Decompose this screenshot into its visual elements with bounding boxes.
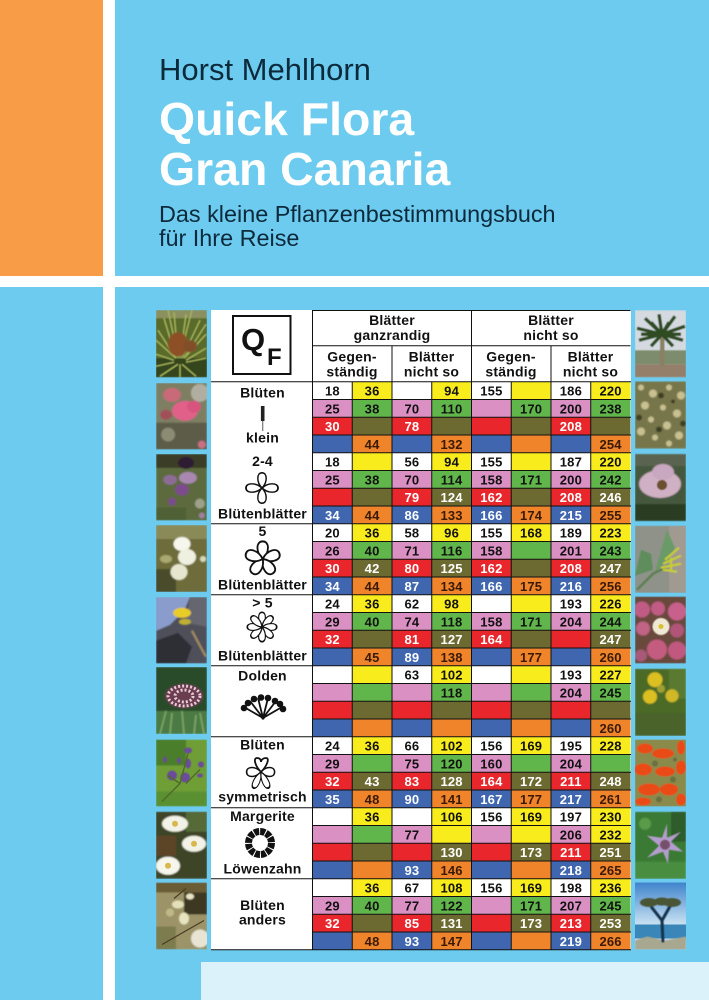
numbers: Blüten anders: 36 bbox=[365, 881, 380, 896]
photo: palm tree bbox=[635, 310, 686, 378]
numbers: Blüten klein: 238 bbox=[599, 401, 622, 416]
book title bbox=[159, 93, 452, 195]
icon: five petals bbox=[244, 541, 281, 576]
row labels: 5 bbox=[258, 523, 266, 539]
column headers: Blätter bbox=[528, 312, 574, 328]
subtitle bbox=[159, 201, 556, 251]
numbers: 5 Blütenblätter: 116 bbox=[441, 543, 462, 558]
numbers: Blüten symmetrisch: 156 bbox=[480, 739, 503, 754]
numbers: Blüten klein: 38 bbox=[365, 401, 380, 416]
numbers: Blüten anders: 67 bbox=[404, 881, 419, 896]
photo: daisies bbox=[156, 812, 207, 879]
numbers: more than 5 Blütenblätter: 62 bbox=[404, 597, 419, 612]
numbers: Blüten symmetrisch: 48 bbox=[365, 792, 380, 807]
numbers: more than 5 Blütenblätter: 74 bbox=[404, 614, 420, 629]
row labels: Blütenblätter bbox=[218, 505, 307, 521]
numbers: more than 5 Blütenblätter: 98 bbox=[444, 597, 459, 612]
photo: dragon tree and sea bbox=[635, 882, 686, 950]
numbers: Blüten klein: 94 bbox=[444, 384, 460, 399]
column headers: nicht so bbox=[563, 364, 618, 380]
icon: small spike flower bbox=[261, 406, 265, 431]
numbers: Blüten anders: 169 bbox=[520, 881, 542, 896]
numbers: Blüten symmetrisch: 172 bbox=[520, 774, 542, 789]
title block bbox=[159, 52, 556, 251]
numbers: 5 Blütenblätter: 162 bbox=[480, 561, 503, 576]
numbers: Blüten symmetrisch: 128 bbox=[440, 774, 463, 789]
numbers: Blüten anders: 173 bbox=[520, 916, 542, 931]
row labels: Dolden bbox=[238, 668, 287, 684]
column headers: ganzrandig bbox=[354, 327, 430, 343]
photo: lilac star flower bbox=[635, 812, 686, 879]
numbers: Blüten symmetrisch: 24 bbox=[325, 739, 340, 754]
numbers: Blüten symmetrisch: 195 bbox=[560, 739, 582, 754]
row labels: Blüten bbox=[240, 897, 285, 913]
numbers: Blüten symmetrisch: 120 bbox=[440, 756, 463, 771]
numbers: Blüten symmetrisch: 102 bbox=[440, 739, 463, 754]
numbers: Blüten klein: 36 bbox=[365, 384, 380, 399]
numbers: more than 5 Blütenblätter: 158 bbox=[480, 614, 503, 629]
numbers: 2-4 Blütenblätter: 158 bbox=[480, 472, 503, 487]
numbers: Blüten symmetrisch: 204 bbox=[560, 756, 583, 771]
numbers: more than 5 Blütenblätter: 138 bbox=[440, 650, 463, 665]
numbers: Margerite Löwenzahn: 173 bbox=[520, 845, 542, 860]
photo: green leaf yellow flower bbox=[635, 526, 686, 593]
numbers: 2-4 Blütenblätter: 79 bbox=[404, 490, 419, 505]
numbers: 2-4 Blütenblätter: 114 bbox=[441, 472, 463, 487]
column headers: Gegen- bbox=[327, 348, 377, 364]
numbers: more than 5 Blütenblätter: 45 bbox=[365, 650, 380, 665]
numbers: Margerite Löwenzahn: 77 bbox=[404, 827, 419, 842]
white vertical band bbox=[103, 0, 115, 1000]
book title: Gran Canaria bbox=[159, 143, 452, 195]
numbers: 5 Blütenblätter: 201 bbox=[560, 543, 582, 558]
numbers: more than 5 Blütenblätter: 127 bbox=[440, 632, 463, 647]
numbers: more than 5 Blütenblätter: 40 bbox=[365, 614, 380, 629]
numbers: 2-4 Blütenblätter: 162 bbox=[480, 490, 503, 505]
numbers: Margerite Löwenzahn: 169 bbox=[520, 810, 542, 825]
numbers: Blüten klein: 170 bbox=[520, 401, 542, 416]
identification table bbox=[211, 310, 631, 950]
numbers: Blüten anders: 29 bbox=[325, 898, 340, 913]
numbers: Blüten anders: 236 bbox=[599, 881, 622, 896]
numbers: Margerite Löwenzahn: 232 bbox=[599, 827, 622, 842]
numbers: Blüten symmetrisch: 83 bbox=[404, 774, 419, 789]
book title: Quick Flora bbox=[159, 93, 415, 145]
numbers: Blüten anders: 171 bbox=[520, 898, 542, 913]
numbers: 5 Blütenblätter: 256 bbox=[599, 579, 622, 594]
numbers: Margerite Löwenzahn: 197 bbox=[560, 810, 582, 825]
photo column: right bbox=[634, 310, 686, 950]
numbers: 5 Blütenblätter: 223 bbox=[599, 526, 622, 541]
numbers: more than 5 Blütenblätter: 193 bbox=[560, 597, 582, 612]
numbers: 2-4 Blütenblätter: 200 bbox=[560, 472, 582, 487]
numbers: more than 5 Blütenblätter: 81 bbox=[404, 632, 419, 647]
numbers: Dolden: 260 bbox=[599, 721, 622, 736]
row labels: Löwenzahn bbox=[223, 860, 302, 876]
photo: pine cone bbox=[156, 310, 207, 378]
numbers: 2-4 Blütenblätter: 246 bbox=[599, 490, 622, 505]
column headers bbox=[312, 310, 630, 382]
numbers: Blüten symmetrisch: 29 bbox=[325, 756, 340, 771]
logo: QF bbox=[233, 316, 290, 374]
numbers: Margerite Löwenzahn bbox=[365, 810, 622, 878]
numbers: Blüten klein: 200 bbox=[560, 401, 582, 416]
numbers: 2-4 Blütenblätter: 255 bbox=[599, 508, 622, 523]
numbers: Blüten anders: 108 bbox=[440, 881, 463, 896]
numbers: 5 Blütenblätter: 87 bbox=[404, 579, 419, 594]
row labels: Blüten bbox=[240, 737, 285, 753]
numbers: Margerite Löwenzahn: 265 bbox=[599, 863, 622, 878]
numbers: Margerite Löwenzahn: 156 bbox=[480, 810, 503, 825]
column headers: Blätter bbox=[369, 312, 415, 328]
row labels: klein bbox=[246, 430, 279, 446]
numbers: 5 Blütenblätter: 168 bbox=[520, 526, 542, 541]
numbers: 5 Blütenblätter: 34 bbox=[325, 579, 340, 594]
photo: purple flowers bbox=[156, 454, 207, 520]
numbers: more than 5 Blütenblätter: 260 bbox=[599, 650, 622, 665]
numbers: Blüten symmetrisch: 141 bbox=[440, 792, 463, 807]
photo: yellow globes bbox=[635, 668, 686, 736]
numbers: Dolden: 63 bbox=[404, 668, 419, 683]
row labels: > 5 bbox=[252, 594, 273, 610]
numbers: Dolden: 227 bbox=[599, 668, 622, 683]
numbers: more than 5 Blütenblätter: 164 bbox=[480, 632, 503, 647]
numbers: Blüten klein: 254 bbox=[599, 437, 622, 452]
numbers: 5 Blütenblätter: 125 bbox=[440, 561, 463, 576]
numbers: 5 Blütenblätter: 71 bbox=[404, 543, 419, 558]
numbers: Blüten klein: 208 bbox=[560, 419, 582, 434]
pale bottom strip bbox=[201, 962, 709, 1000]
numbers: Blüten symmetrisch: 90 bbox=[404, 792, 419, 807]
numbers: 5 Blütenblätter: 158 bbox=[480, 543, 503, 558]
numbers: Dolden: 102 bbox=[440, 668, 463, 683]
numbers: Dolden bbox=[404, 668, 622, 736]
numbers: 2-4 Blütenblätter: 25 bbox=[325, 472, 340, 487]
table base bbox=[211, 310, 631, 950]
numbers: more than 5 Blütenblätter: 29 bbox=[325, 614, 340, 629]
subtitle: Das kleine Pflanzenbestimmungsbuch bbox=[159, 201, 556, 227]
numbers: Blüten anders: 147 bbox=[440, 934, 463, 949]
numbers: Margerite Löwenzahn: 130 bbox=[440, 845, 463, 860]
numbers: 2-4 Blütenblätter: 133 bbox=[440, 508, 463, 523]
numbers: Blüten anders: 253 bbox=[599, 916, 622, 931]
numbers: 5 Blütenblätter: 96 bbox=[444, 526, 459, 541]
numbers: 5 Blütenblätter: 134 bbox=[440, 579, 463, 594]
numbers: Blüten symmetrisch: 66 bbox=[404, 739, 419, 754]
numbers: 2-4 Blütenblätter: 208 bbox=[560, 490, 582, 505]
numbers: 2-4 Blütenblätter: 174 bbox=[520, 508, 543, 523]
column headers: Gegen- bbox=[486, 348, 536, 364]
numbers: Blüten klein: 110 bbox=[441, 401, 462, 416]
icon: symmetric flower bbox=[247, 758, 275, 789]
numbers: more than 5 Blütenblätter: 89 bbox=[404, 650, 419, 665]
numbers: Blüten symmetrisch: 36 bbox=[365, 739, 380, 754]
numbers: 5 Blütenblätter: 40 bbox=[365, 543, 380, 558]
numbers: 2-4 Blütenblätter: 220 bbox=[599, 455, 622, 470]
numbers: Blüten anders: 198 bbox=[560, 881, 582, 896]
numbers: 5 Blütenblätter: 36 bbox=[365, 526, 380, 541]
column headers: ständig bbox=[485, 364, 537, 380]
white horizontal band bbox=[0, 276, 709, 287]
row labels: Blütenblätter bbox=[218, 648, 307, 664]
photo: pale poppy bbox=[635, 454, 686, 522]
numbers: more than 5 Blütenblätter: 177 bbox=[520, 650, 542, 665]
numbers: Blüten symmetrisch: 248 bbox=[599, 774, 622, 789]
icon: umbel bbox=[241, 694, 286, 720]
column headers: nicht so bbox=[523, 327, 579, 343]
numbers: 2-4 Blütenblätter: 86 bbox=[404, 508, 419, 523]
row labels: Margerite bbox=[230, 808, 295, 824]
numbers: Margerite Löwenzahn: 146 bbox=[440, 863, 463, 878]
numbers: 5 Blütenblätter: 26 bbox=[325, 543, 340, 558]
numbers: Blüten klein: 186 bbox=[560, 384, 582, 399]
numbers: Blüten anders: 266 bbox=[599, 934, 622, 949]
author: Horst Mehlhorn bbox=[159, 52, 371, 87]
numbers: Blüten symmetrisch: 32 bbox=[325, 774, 340, 789]
photo: purple sprigs bbox=[156, 740, 207, 806]
numbers: Blüten anders: 207 bbox=[560, 898, 582, 913]
numbers: 5 Blütenblätter: 44 bbox=[365, 579, 380, 594]
numbers: Blüten anders: 48 bbox=[365, 934, 380, 949]
numbers: 2-4 Blütenblätter: 38 bbox=[365, 472, 380, 487]
numbers: Blüten anders: 77 bbox=[404, 898, 419, 913]
numbers: Margerite Löwenzahn: 93 bbox=[404, 863, 419, 878]
numbers: Blüten anders: 122 bbox=[440, 898, 463, 913]
numbers: Blüten symmetrisch: 35 bbox=[325, 792, 340, 807]
numbers: 5 Blütenblätter: 175 bbox=[520, 579, 542, 594]
numbers: Blüten anders bbox=[325, 881, 622, 949]
numbers: 5 Blütenblätter: 216 bbox=[560, 579, 582, 594]
icon: eight petals bbox=[247, 612, 277, 642]
numbers: Blüten symmetrisch: 164 bbox=[480, 774, 503, 789]
numbers: 2-4 Blütenblätter: 155 bbox=[480, 455, 503, 470]
numbers: 5 Blütenblätter: 58 bbox=[404, 526, 419, 541]
colour grid bbox=[211, 310, 631, 950]
numbers: more than 5 Blütenblätter: 36 bbox=[365, 597, 380, 612]
row labels: symmetrisch bbox=[218, 789, 307, 805]
numbers: more than 5 Blütenblätter: 32 bbox=[325, 632, 340, 647]
numbers: 5 Blütenblätter: 166 bbox=[480, 579, 503, 594]
photo: umbel bbox=[156, 667, 207, 734]
numbers: Margerite Löwenzahn: 106 bbox=[440, 810, 463, 825]
photo: white bindweed bbox=[156, 525, 207, 592]
photo: pink blossom bbox=[156, 383, 207, 450]
numbers: more than 5 Blütenblätter: 118 bbox=[441, 614, 462, 629]
numbers: Margerite Löwenzahn: 36 bbox=[365, 810, 380, 825]
row labels: 2-4 bbox=[252, 453, 273, 469]
logo: QF: F bbox=[267, 344, 282, 371]
numbers: 2-4 Blütenblätter: 124 bbox=[440, 490, 463, 505]
numbers: Blüten klein bbox=[325, 384, 622, 452]
numbers: 2-4 Blütenblätter: 70 bbox=[404, 472, 419, 487]
numbers: 2-4 Blütenblätter: 94 bbox=[444, 455, 460, 470]
numbers: 5 Blütenblätter: 155 bbox=[480, 526, 503, 541]
numbers: 2-4 Blütenblätter: 44 bbox=[365, 508, 380, 523]
column headers: Blätter bbox=[568, 348, 614, 364]
row labels: Blüten bbox=[240, 384, 285, 400]
numbers: Margerite Löwenzahn: 230 bbox=[599, 810, 622, 825]
numbers: 5 Blütenblätter: 243 bbox=[599, 543, 622, 558]
photo: yellow on rock bbox=[156, 597, 207, 664]
numbers: Blüten klein: 30 bbox=[325, 419, 340, 434]
numbers: 2-4 Blütenblätter: 166 bbox=[480, 508, 503, 523]
numbers: Blüten anders: 219 bbox=[560, 934, 582, 949]
numbers: Blüten anders: 131 bbox=[440, 916, 463, 931]
numbers: more than 5 Blütenblätter: 204 bbox=[560, 614, 583, 629]
numbers: Blüten symmetrisch: 167 bbox=[480, 792, 503, 807]
numbers: Blüten klein: 18 bbox=[325, 384, 340, 399]
numbers: Margerite Löwenzahn: 206 bbox=[560, 827, 582, 842]
row labels: Blütenblätter bbox=[218, 576, 307, 592]
numbers: Margerite Löwenzahn: 211 bbox=[560, 845, 582, 860]
column headers: ständig bbox=[326, 364, 378, 380]
photo: olive shrub bbox=[635, 381, 686, 449]
numbers: 5 Blütenblätter: 247 bbox=[599, 561, 622, 576]
numbers: 5 Blütenblätter bbox=[325, 526, 622, 594]
numbers: more than 5 Blütenblätter: 171 bbox=[520, 614, 542, 629]
numbers: 2-4 Blütenblätter: 171 bbox=[520, 472, 542, 487]
column headers: Blätter bbox=[409, 348, 455, 364]
numbers: Blüten anders: 32 bbox=[325, 916, 340, 931]
numbers: more than 5 Blütenblätter bbox=[325, 597, 622, 665]
numbers: Blüten klein: 220 bbox=[599, 384, 622, 399]
numbers: Blüten symmetrisch: 177 bbox=[520, 792, 542, 807]
numbers: Blüten klein: 25 bbox=[325, 401, 340, 416]
numbers: Blüten symmetrisch: 160 bbox=[480, 756, 503, 771]
numbers: 5 Blütenblätter: 20 bbox=[325, 526, 340, 541]
numbers: Blüten anders: 85 bbox=[404, 916, 419, 931]
numbers: Dolden: 193 bbox=[560, 668, 582, 683]
numbers: 2-4 Blütenblätter: 187 bbox=[560, 455, 582, 470]
numbers: 2-4 Blütenblätter: 34 bbox=[325, 508, 340, 523]
numbers: more than 5 Blütenblätter: 226 bbox=[599, 597, 622, 612]
numbers: more than 5 Blütenblätter: 247 bbox=[599, 632, 622, 647]
orange spine block bbox=[0, 0, 103, 276]
numbers: Blüten symmetrisch: 43 bbox=[365, 774, 380, 789]
numbers: 2-4 Blütenblätter: 242 bbox=[599, 472, 622, 487]
numbers: 5 Blütenblätter: 80 bbox=[404, 561, 419, 576]
numbers: Dolden: 118 bbox=[441, 685, 462, 700]
icon: daisy bbox=[248, 832, 272, 854]
numbers: Blüten klein: 132 bbox=[440, 437, 463, 452]
numbers: more than 5 Blütenblätter: 24 bbox=[325, 597, 340, 612]
numbers: Blüten anders: 213 bbox=[560, 916, 582, 931]
numbers: Blüten symmetrisch: 75 bbox=[404, 756, 419, 771]
photo column: left bbox=[156, 310, 209, 950]
numbers: 2-4 Blütenblätter: 18 bbox=[325, 455, 340, 470]
numbers: Blüten anders: 93 bbox=[404, 934, 419, 949]
numbers: Blüten symmetrisch: 211 bbox=[560, 774, 582, 789]
numbers: 2-4 Blütenblätter: 215 bbox=[560, 508, 582, 523]
row labels bbox=[218, 384, 307, 927]
numbers: Dolden: 204 bbox=[560, 685, 583, 700]
photo: red orange flowers bbox=[635, 740, 686, 806]
numbers: Blüten klein: 70 bbox=[404, 401, 419, 416]
photo: pink succulent flowers bbox=[635, 596, 686, 664]
numbers: 5 Blütenblätter: 189 bbox=[560, 526, 582, 541]
numbers: Blüten symmetrisch: 169 bbox=[520, 739, 542, 754]
numbers: Blüten symmetrisch: 228 bbox=[599, 739, 622, 754]
numbers: Margerite Löwenzahn: 251 bbox=[599, 845, 622, 860]
numbers: 5 Blütenblätter: 208 bbox=[560, 561, 582, 576]
numbers: 5 Blütenblätter: 30 bbox=[325, 561, 340, 576]
numbers: Blüten klein: 155 bbox=[480, 384, 503, 399]
numbers: Blüten anders: 40 bbox=[365, 898, 380, 913]
numbers: Blüten klein: 78 bbox=[404, 419, 419, 434]
numbers: Blüten symmetrisch: 217 bbox=[560, 792, 582, 807]
numbers: Blüten anders: 245 bbox=[599, 898, 622, 913]
logo: QF: Q bbox=[241, 322, 265, 357]
photo: pale shrub bbox=[156, 882, 207, 950]
column headers: nicht so bbox=[404, 364, 459, 380]
icon: four petals bbox=[246, 473, 278, 503]
numbers: 5 Blütenblätter: 42 bbox=[365, 561, 380, 576]
numbers: Blüten klein: 44 bbox=[365, 437, 380, 452]
row labels: anders bbox=[239, 911, 286, 927]
numbers: Dolden: 245 bbox=[599, 685, 622, 700]
numbers: Blüten symmetrisch: 261 bbox=[599, 792, 622, 807]
numbers: Blüten symmetrisch bbox=[325, 739, 622, 807]
numbers: Margerite Löwenzahn: 218 bbox=[560, 863, 582, 878]
subtitle: für Ihre Reise bbox=[159, 225, 299, 251]
numbers: 2-4 Blütenblätter bbox=[325, 455, 622, 523]
numbers: Blüten anders: 156 bbox=[480, 881, 503, 896]
numbers: more than 5 Blütenblätter: 244 bbox=[599, 614, 622, 629]
numbers: 2-4 Blütenblätter: 56 bbox=[404, 455, 419, 470]
